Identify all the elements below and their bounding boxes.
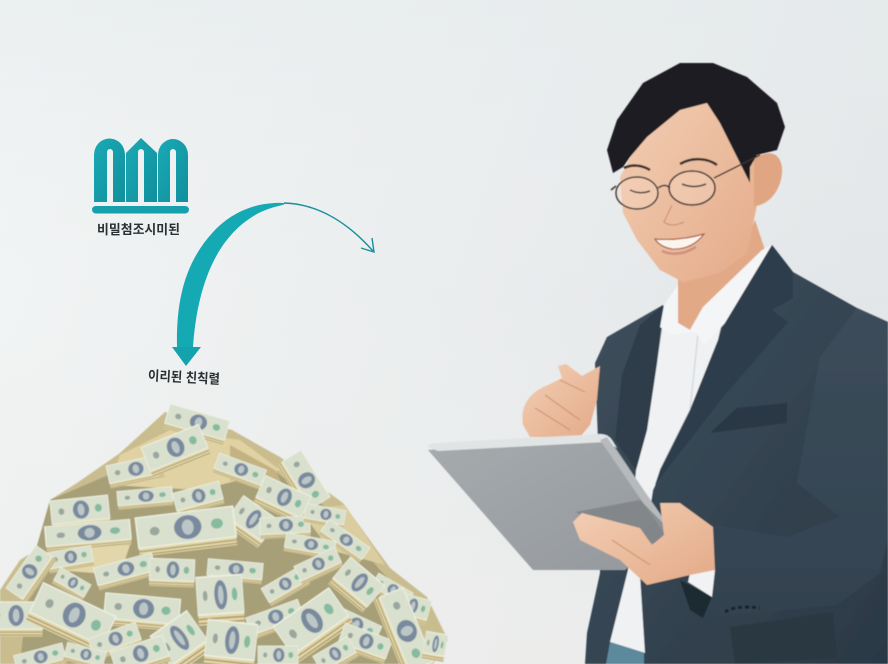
nose (664, 205, 684, 225)
eyebrows (624, 159, 717, 170)
icon: tablet (428, 434, 670, 570)
eyes (630, 184, 706, 193)
raised hand (522, 364, 600, 437)
arrow: curved teal arrow (172, 203, 374, 366)
arrow caption: 이리된 친칙렬 (148, 368, 220, 387)
ear (754, 153, 782, 206)
jeans (606, 642, 644, 664)
neck (678, 220, 765, 330)
logo caption: 비밀첨조시미된 (97, 222, 180, 237)
right lapel (655, 245, 793, 485)
jacket body (585, 245, 888, 664)
money pile (0, 404, 448, 664)
person: businessman (428, 63, 888, 664)
shirt cuff (688, 570, 715, 597)
glasses (611, 155, 760, 209)
shirt collar (660, 245, 772, 345)
left lapel (615, 305, 663, 470)
hair (607, 63, 785, 183)
shirt (606, 310, 725, 664)
icon: teal building logo (92, 138, 189, 214)
head (607, 63, 785, 282)
jacket sleeve (680, 308, 888, 664)
holding hand (573, 503, 715, 585)
mouth (655, 234, 704, 249)
chest pocket (710, 403, 787, 433)
